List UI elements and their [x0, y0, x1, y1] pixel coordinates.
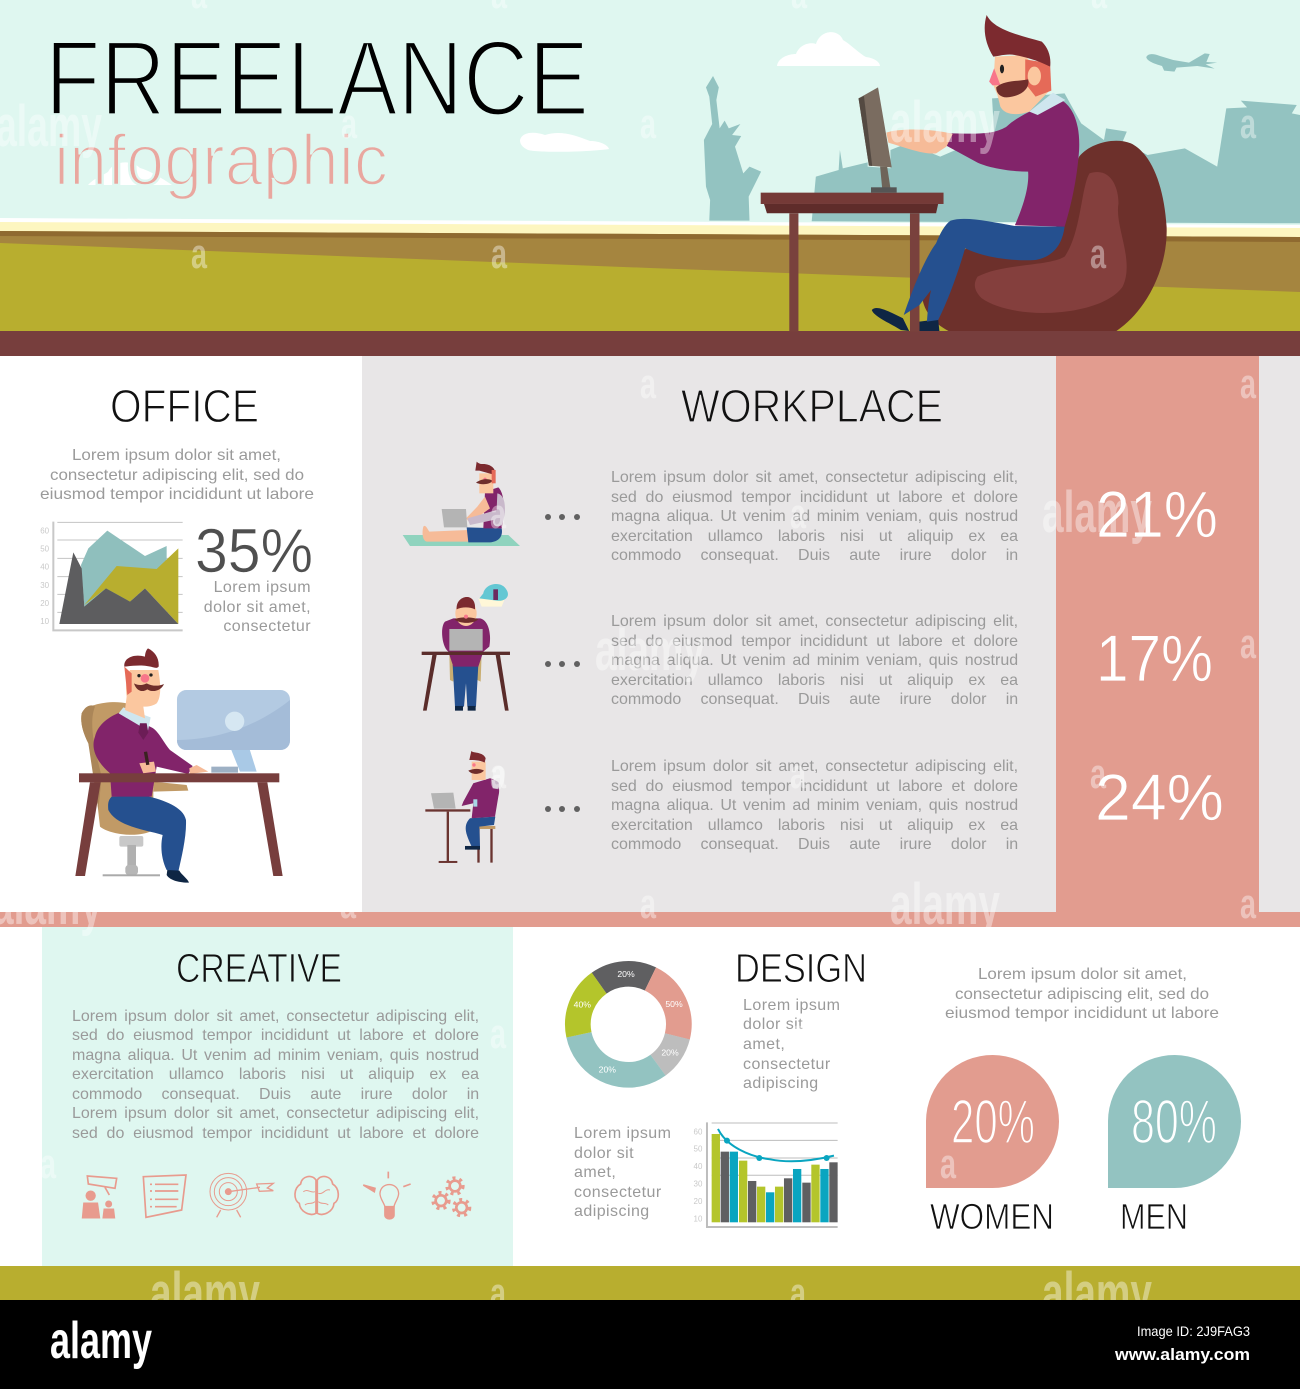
donut chart [558, 954, 699, 1095]
eyes [137, 673, 153, 677]
text block: exercitation ullamco laboris nisi ut aliquip ex ea [611, 817, 1018, 834]
text: image id: Image ID: 2J9FAG3 [1137, 1323, 1250, 1339]
heading: creative: CREATIVE [176, 945, 342, 991]
icon row [83, 1172, 470, 1219]
text block: 35% caption: Lorem ipsum [214, 579, 311, 596]
panel: creative [42, 927, 513, 1266]
heading: freelance: FREELANCE [45, 18, 589, 138]
watermarks: a [790, 490, 806, 537]
hair [985, 15, 1050, 67]
watermarks: a [341, 100, 357, 147]
text block: office intro: Lorem ipsum dolor sit amet, [72, 447, 281, 464]
watermarks: alamy [0, 94, 102, 159]
dots [545, 806, 580, 812]
text block: commodo consequat. Duis aute irure dolor in [611, 836, 1018, 853]
text block: commodo consequat. Duis aute irure dolor in [611, 547, 1018, 564]
watermarks: a [640, 880, 656, 927]
icon: city skyline silhouette [812, 93, 1300, 223]
text block: bar chart caption: consectetur [574, 1184, 662, 1201]
illustration: freelancer at desk on beanbag [761, 15, 1167, 332]
illustration: man on stool with coffee [425, 751, 505, 863]
icon: brain [295, 1177, 338, 1214]
panel: hero banner [0, 0, 1300, 356]
watermarks: alamy [1042, 1261, 1152, 1326]
text block: office intro: eiusmod tempor incididunt ut labore [40, 486, 314, 503]
watermarks: a [40, 1140, 56, 1187]
watermarks: a [490, 1269, 506, 1316]
text block: bar chart caption: Lorem ipsum [574, 1125, 671, 1142]
area chart: 20 [40, 599, 50, 608]
watermarks: alamy [890, 90, 1000, 155]
watermarks: a [790, 750, 806, 797]
neck and face [125, 670, 160, 718]
text block: creative body: exercitation ullamco laboris nisi ut aliquip ex ea [72, 1066, 479, 1083]
panel: design [558, 945, 867, 1227]
text block: donut caption [743, 997, 840, 1092]
subheading: infographic: infographic [54, 121, 388, 201]
illustration: seated on mat with laptop [403, 462, 520, 546]
donut chart: 20% [617, 969, 635, 979]
bar and line chart: 40 [694, 1162, 703, 1171]
area chart: 50 [40, 545, 50, 554]
bar and line chart: 60 [694, 1127, 703, 1136]
text block [611, 613, 1018, 708]
watermarks: a [340, 880, 356, 927]
bar and line chart [694, 1122, 838, 1227]
eye [1000, 65, 1004, 73]
text block: 35% caption: consectetur [223, 618, 311, 635]
collar [1029, 93, 1065, 115]
text: website: www.alamy.com [1114, 1345, 1250, 1364]
row: cafe stool worker [425, 751, 1018, 863]
trousers [108, 796, 186, 872]
watermarks: a [640, 360, 656, 407]
text block: Lorem ipsum dolor sit amet, consectetur adipiscing elit, [611, 758, 1018, 775]
stat: 17%: 17% [1096, 621, 1213, 695]
stat: men 80% [1108, 1055, 1241, 1237]
text block: donut caption: Lorem ipsum [743, 997, 840, 1014]
watermarks: a [790, 1010, 806, 1057]
watermarks: alamy [1042, 480, 1152, 545]
watermarks: a [1240, 620, 1256, 667]
label: women: WOMEN [930, 1196, 1054, 1237]
stat: women 20% [926, 1055, 1059, 1237]
monitor [177, 690, 290, 773]
panel: workplace [362, 356, 1056, 912]
watermarks: alamy [595, 618, 705, 683]
row: yoga mat worker [403, 462, 1018, 564]
text block: Lorem ipsum dolor sit amet, consectetur adipiscing elit, [611, 469, 1018, 486]
stat: men 80%: 80% [1131, 1088, 1217, 1157]
text block: exercitation ullamco laboris nisi ut aliquip ex ea [611, 672, 1018, 689]
text block: exercitation ullamco laboris nisi ut aliquip ex ea [611, 528, 1018, 545]
trousers [904, 219, 1065, 322]
shoes [872, 308, 939, 331]
thought bubble [478, 584, 508, 607]
sweater [945, 98, 1079, 227]
icon: statue of liberty silhouette [704, 76, 761, 221]
label: men: MEN [1120, 1196, 1188, 1237]
hair [124, 648, 159, 668]
watermarks: alamy [890, 872, 1000, 937]
text block: bar chart caption: amet, [574, 1164, 616, 1181]
text block: gender intro: Lorem ipsum dolor sit amet, [978, 966, 1187, 983]
illustration: man dreaming at desk [422, 584, 510, 711]
icon: gears [433, 1178, 470, 1216]
text block: bar chart caption: adipiscing [574, 1203, 650, 1220]
watermarks: a [491, 230, 507, 277]
chair [81, 702, 188, 876]
collar [119, 707, 151, 731]
donut chart: 40% [574, 999, 591, 1009]
ear [1028, 67, 1041, 85]
logo: alamy: alamy [50, 1312, 152, 1370]
text block: donut caption: amet, [743, 1036, 785, 1053]
text block: 35% caption: dolor sit amet, [204, 599, 311, 616]
icon: people talking [83, 1176, 117, 1218]
icon: target with arrow [210, 1173, 273, 1217]
donut chart: 20% [661, 1048, 679, 1058]
area chart: 40 [40, 563, 50, 572]
icon: checklist [143, 1175, 186, 1217]
donut chart: 20% [599, 1064, 616, 1074]
text block: gender intro: eiusmod tempor incididunt ut labore [945, 1005, 1219, 1022]
dots [545, 661, 580, 667]
watermarks: a [790, 1269, 806, 1316]
stat: 24%: 24% [1095, 760, 1224, 834]
watermarks: a [640, 100, 656, 147]
donut chart: 50% [665, 999, 683, 1009]
text block [611, 758, 1018, 853]
area chart: 60 [40, 527, 50, 536]
area chart: 10 [40, 617, 50, 626]
watermarks: a [1090, 750, 1106, 797]
icon: airplane [1146, 53, 1217, 72]
text block: creative body [72, 1008, 479, 1142]
beanbag [922, 141, 1167, 331]
text block: office intro [40, 447, 314, 503]
panel: office [0, 356, 362, 912]
watermarks: a [490, 750, 506, 797]
area chart [40, 522, 183, 630]
text block: creative body: sed do eiusmod tempor incididunt ut labore et dolore [72, 1027, 479, 1044]
watermarks: a [490, 490, 506, 537]
text block: bar chart caption [574, 1125, 671, 1220]
text block: creative body: Lorem ipsum dolor sit amet, consectetur adipiscing elit, [72, 1105, 479, 1122]
dots [545, 514, 580, 520]
hands [886, 130, 953, 154]
text block: donut caption: dolor sit [743, 1016, 803, 1033]
shoe [167, 870, 189, 883]
text block: 35% caption [204, 579, 311, 635]
stat: women 20%: 20% [951, 1088, 1035, 1157]
bar and line chart: 50 [694, 1145, 703, 1154]
text block: creative body: magna aliqua. Ut venim ad minim veniam, quis nostrud [72, 1047, 479, 1064]
nose [141, 674, 149, 683]
text block: creative body: sed do eiusmod tempor incididunt ut labore et dolore [72, 1125, 479, 1142]
moustache [134, 683, 164, 691]
text block: sed do eiusmod tempor incididunt ut labore et dolore [611, 489, 1018, 506]
text block: creative body: Lorem ipsum dolor sit amet, consectetur adipiscing elit, [72, 1008, 479, 1025]
bar and line chart: 10 [694, 1215, 703, 1224]
hair side [1025, 59, 1051, 97]
text block: creative body: commodo consequat. Duis aute irure dolor in [72, 1086, 479, 1103]
text block: magna aliqua. Ut venim ad minim veniam, quis nostrud [611, 508, 1018, 525]
watermarks: a [940, 1140, 956, 1187]
watermarks: a [1240, 360, 1256, 407]
tie [138, 723, 148, 740]
stat: 21%: 21% [1096, 477, 1218, 551]
area chart: 30 [40, 581, 50, 590]
text block: bar chart caption: dolor sit [574, 1145, 634, 1162]
text block: gender intro [945, 966, 1219, 1022]
text block: gender intro: consectetur adipiscing elit, sed do [955, 986, 1209, 1003]
watermarks: a [191, 230, 207, 277]
bar and line chart: 30 [694, 1180, 703, 1189]
sweater [94, 713, 193, 797]
row: desk dreamer [422, 584, 1018, 711]
bar and line chart: 20 [694, 1197, 703, 1206]
text block: sed do eiusmod tempor incididunt ut labore et dolore [611, 778, 1018, 795]
text block: office intro: consectetur adipiscing elit, sed do [50, 467, 304, 484]
footer bar [0, 1300, 1300, 1389]
watermarks: a [490, 1010, 506, 1057]
text block: magna aliqua. Ut venim ad minim veniam, quis nostrud [611, 797, 1018, 814]
heading: workplace: WORKPLACE [681, 380, 943, 432]
stat: 35%: 35% [195, 517, 313, 586]
nose [989, 68, 1000, 85]
icon: clouds [88, 32, 880, 185]
illustration: man at office desk [75, 648, 290, 883]
panel: percentages column [1056, 356, 1300, 912]
watermarks: a [1240, 880, 1256, 927]
text block: donut caption: consectetur [743, 1056, 831, 1073]
watermarks: a [1240, 100, 1256, 147]
watermarks: alamy [150, 1261, 260, 1326]
panel: gender split [926, 966, 1241, 1237]
text block: Lorem ipsum dolor sit amet, consectetur adipiscing elit, [611, 613, 1018, 630]
heading: office: OFFICE [110, 380, 259, 432]
title [45, 18, 589, 201]
computer monitor [859, 87, 897, 193]
desk [761, 193, 944, 332]
heading: design: DESIGN [735, 945, 867, 991]
watermarks: a [1090, 230, 1106, 277]
icon: light bulb [363, 1172, 411, 1219]
beard [996, 79, 1029, 97]
text block: magna aliqua. Ut venim ad minim veniam, quis nostrud [611, 652, 1018, 669]
face and neck [993, 55, 1050, 114]
hands [139, 762, 156, 773]
text block: sed do eiusmod tempor incididunt ut labore et dolore [611, 633, 1018, 650]
desk [75, 773, 283, 876]
text block: commodo consequat. Duis aute irure dolor in [611, 691, 1018, 708]
text block [611, 469, 1018, 564]
text block: donut caption: adipiscing [743, 1075, 819, 1092]
